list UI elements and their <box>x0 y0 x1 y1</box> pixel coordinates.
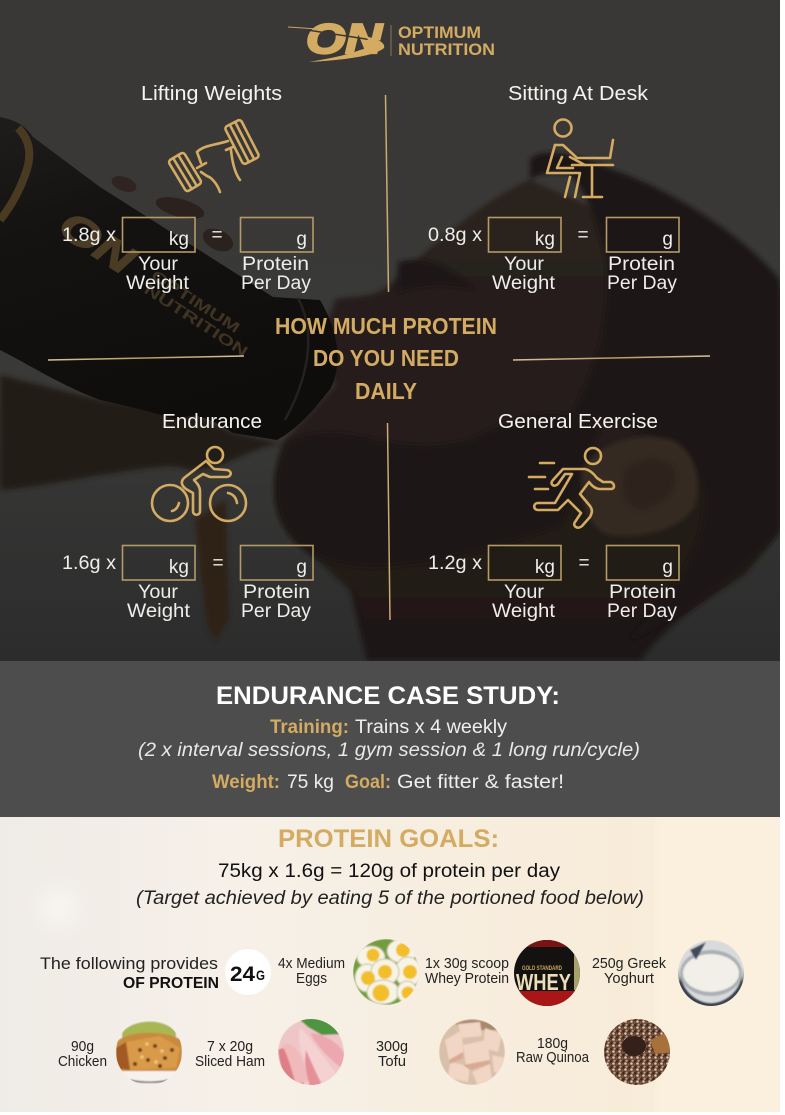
case study details: (2 x interval sessions, 1 gym session & 1 long run/cycle) <box>138 740 640 761</box>
logo: Optimum Nutrition: NUTRITION <box>398 40 495 59</box>
intro: the following provides of protein: The following provides <box>40 954 218 973</box>
icon: cyclist <box>152 447 246 521</box>
food: whey protein: WHEY <box>516 969 571 995</box>
formula: 1.2g x weight = protein: Per Day <box>607 601 678 622</box>
formula: 1.2g x weight = protein: 1.2g x <box>428 553 483 574</box>
badge: 24g: G <box>256 967 265 983</box>
formula: 1.8g x weight = protein: 1.8g x <box>62 225 117 246</box>
case study details: Training: <box>270 717 349 738</box>
formula: 0.8g x weight = protein: Your <box>504 254 545 275</box>
formula: 0.8g x weight = protein: Protein <box>608 254 675 275</box>
food: sliced ham <box>195 1018 346 1086</box>
case study details: Get fitter & faster! <box>397 772 564 793</box>
formula: 0.8g x weight = protein: Per Day <box>607 273 678 294</box>
white margin right <box>780 0 785 1115</box>
food: raw quinoa <box>516 1019 672 1085</box>
intro: the following provides of protein: OF PROTEIN <box>123 975 219 992</box>
icon: dumbbell in hand <box>168 119 260 192</box>
title: how much protein do you need daily: DO YOU NEED <box>313 345 459 371</box>
case study details <box>138 717 640 793</box>
formula: 1.2g x weight = protein: Your <box>504 582 545 603</box>
heading: lifting weights: Lifting Weights <box>141 83 282 105</box>
heading: endurance: Endurance <box>162 411 262 433</box>
food: eggs: 4x Medium <box>278 955 345 972</box>
formula: 1.8g x weight = protein: Your <box>138 254 179 275</box>
formula: 1.6g x weight = protein: kg <box>169 557 189 578</box>
food: tofu: Tofu <box>378 1053 406 1070</box>
formula: 1.8g x weight = protein: g <box>296 229 307 250</box>
heading: general exercise: General Exercise <box>498 411 658 433</box>
case study details: 75 kg <box>287 772 334 793</box>
food: tofu <box>376 1019 506 1086</box>
case study details: Weight: <box>212 772 280 793</box>
food: whey protein: Whey Protein <box>425 970 509 987</box>
food: raw quinoa: Raw Quinoa <box>516 1049 590 1066</box>
heading: sitting at desk: Sitting At Desk <box>508 83 649 105</box>
formula: 0.8g x weight = protein: Weight <box>492 273 556 294</box>
formula: 1.6g x weight = protein: Per Day <box>241 601 312 622</box>
food: eggs: Eggs <box>296 970 327 987</box>
heading: protein goals: PROTEIN GOALS: <box>278 825 499 853</box>
title: how much protein do you need daily <box>275 313 497 404</box>
formula: 1.6g x weight = protein: Weight <box>127 601 191 622</box>
formula: 0.8g x weight = protein: = <box>577 225 589 246</box>
food: tofu: 300g <box>376 1038 408 1055</box>
formula: 1.8g x weight = protein: = <box>211 225 223 246</box>
panel: endurance <box>62 411 313 622</box>
formula: 1.2g x weight = protein: = <box>578 553 590 574</box>
formula: 1.6g x weight = protein: 1.6g x <box>62 553 117 574</box>
formula: 0.8g x weight = protein: kg <box>535 229 555 250</box>
formula: 0.8g x weight = protein: g <box>662 229 673 250</box>
title: how much protein do you need daily: DAILY <box>355 378 417 404</box>
logo: Optimum Nutrition: OPTIMUM <box>398 23 481 42</box>
food: whey protein <box>425 940 580 1006</box>
background photo: athlete drinking from shaker: ON <box>51 203 143 284</box>
formula: 1.2g x weight = protein <box>428 546 679 622</box>
formula: 1.8g x weight = protein: Protein <box>242 254 309 275</box>
case study details: Trains x 4 weekly <box>355 717 508 738</box>
panel: lifting weights <box>62 83 313 294</box>
panel: general exercise <box>428 411 679 622</box>
protein calculation: 75kg x 1.6g = 120g of protein per day <box>218 861 561 882</box>
icon: person at desk <box>547 120 613 197</box>
formula: 1.2g x weight = protein: Protein <box>609 582 676 603</box>
badge: 24g <box>225 949 271 995</box>
food: raw quinoa: 180g <box>537 1035 568 1052</box>
panel: sitting at desk <box>428 83 679 294</box>
background photo: athlete drinking from shaker: NUTRITION <box>141 281 251 361</box>
formula: 1.8g x weight = protein: Per Day <box>241 273 312 294</box>
target note: (Target achieved by eating 5 of the portioned food below) <box>136 888 644 909</box>
food: eggs <box>278 939 421 1005</box>
formula: 1.6g x weight = protein: g <box>296 557 307 578</box>
case study details: Goal: <box>345 772 391 793</box>
background photo: athlete drinking from shaker: OPTIMUM <box>148 267 243 337</box>
formula: 1.6g x weight = protein: Protein <box>243 582 310 603</box>
food: chicken: Chicken <box>58 1053 107 1070</box>
food: sliced ham: 7 x 20g <box>207 1038 253 1055</box>
formula: 1.6g x weight = protein: Your <box>138 582 179 603</box>
food: chicken <box>58 1019 182 1085</box>
food: sliced ham: Sliced Ham <box>195 1053 265 1070</box>
formula: 0.8g x weight = protein: 0.8g x <box>428 225 483 246</box>
badge: 24g: 24 <box>230 963 255 986</box>
food: chicken: 90g <box>71 1038 94 1055</box>
food: greek yoghurt <box>592 940 744 1010</box>
icon: runner <box>529 448 614 528</box>
logo: Optimum Nutrition: ON <box>306 15 384 62</box>
panel: protein goals <box>0 817 780 1112</box>
panel: endurance case study <box>0 661 780 817</box>
title: how much protein do you need daily: HOW MUCH PROTEIN <box>275 313 497 339</box>
food: greek yoghurt: 250g Greek <box>592 955 666 972</box>
formula: 1.8g x weight = protein <box>62 218 313 294</box>
formula: 1.6g x weight = protein: = <box>212 553 224 574</box>
food: whey protein: GOLD STANDARD <box>522 966 563 972</box>
formula: 1.6g x weight = protein <box>62 546 313 622</box>
food: whey protein: 1x 30g scoop <box>425 955 509 972</box>
formula: 1.2g x weight = protein: kg <box>535 557 555 578</box>
formula: 1.2g x weight = protein: Weight <box>492 601 556 622</box>
formula: 1.8g x weight = protein: Weight <box>126 273 190 294</box>
dividers <box>48 95 710 620</box>
intro: the following provides of protein <box>40 954 219 992</box>
food: greek yoghurt: Yoghurt <box>604 970 655 987</box>
logo: Optimum Nutrition <box>288 15 495 62</box>
formula: 1.2g x weight = protein: g <box>662 557 673 578</box>
formula: 0.8g x weight = protein <box>428 218 679 294</box>
formula: 1.8g x weight = protein: kg <box>169 229 189 250</box>
background photo: athlete drinking from shaker <box>0 0 780 661</box>
heading: endurance case study: ENDURANCE CASE STUDY: <box>216 682 560 710</box>
